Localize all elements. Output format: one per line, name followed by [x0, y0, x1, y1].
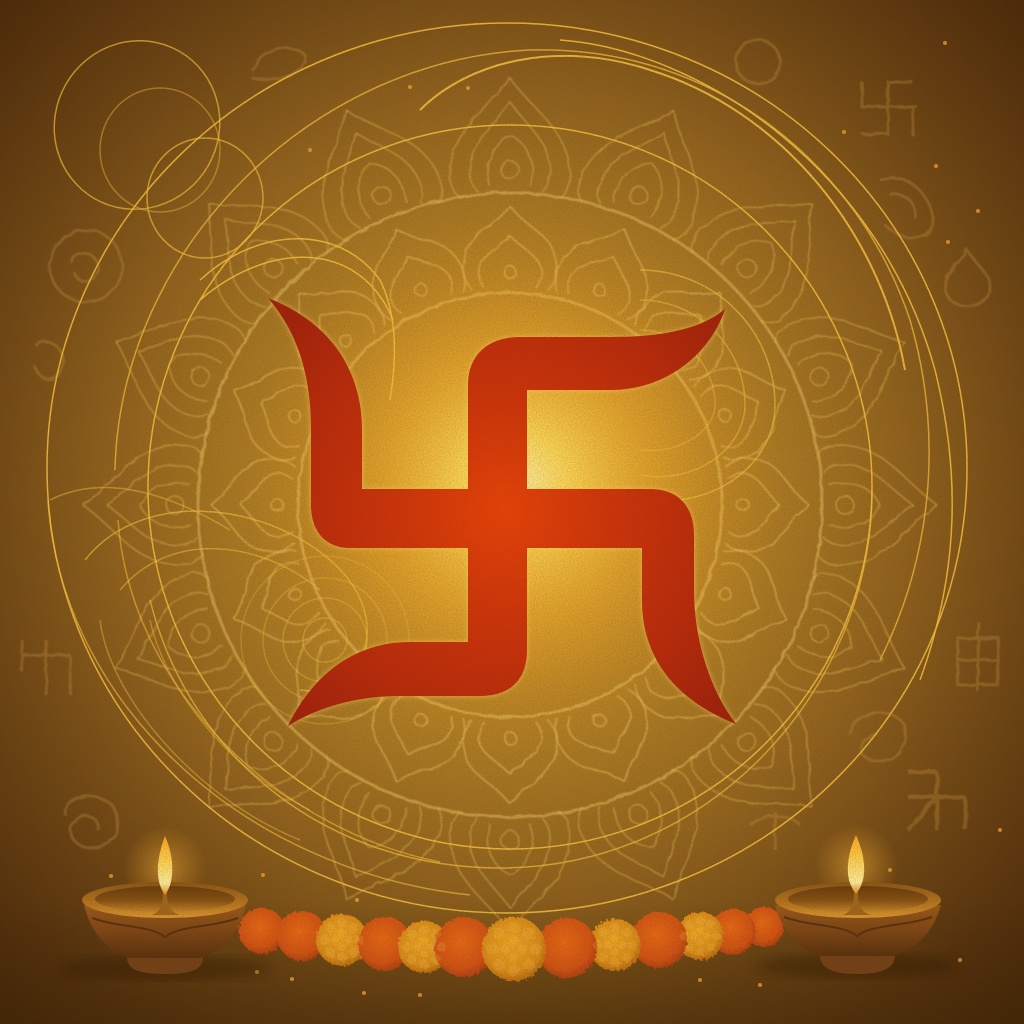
right spirals in centre — [640, 270, 775, 501]
motif: right symbol — [958, 622, 998, 692]
motif: lower left circle — [65, 796, 118, 848]
motif: left circle — [50, 230, 122, 302]
motif: left symbol — [22, 640, 70, 695]
top-left coils — [23, 10, 251, 240]
motif: top left om — [252, 48, 306, 80]
motif: bottom squiggle — [750, 812, 800, 850]
motif: lower right circle — [850, 713, 906, 761]
petal texture — [320, 916, 720, 977]
motif: right swirl circle — [880, 178, 932, 238]
floor shading — [0, 900, 1024, 1024]
wick — [843, 892, 871, 915]
symbol glow — [268, 298, 736, 726]
motif: right drop — [945, 250, 990, 306]
flame — [158, 836, 172, 895]
auspicious symbol: red shape with glow — [268, 298, 736, 726]
bowl — [775, 905, 941, 956]
bowl ornament — [92, 918, 238, 937]
motif: top circle — [736, 40, 780, 84]
foot — [820, 950, 895, 974]
outer petal ring — [83, 78, 937, 932]
lower left spirals — [85, 511, 367, 691]
motif: left small — [34, 342, 63, 379]
flame halo — [814, 824, 898, 908]
symbol body — [268, 298, 736, 726]
mandala — [83, 78, 937, 932]
diya: right — [757, 824, 957, 978]
motif: lower right symbol — [908, 772, 965, 830]
wick — [152, 892, 180, 915]
interior — [95, 886, 235, 912]
rim — [82, 882, 248, 918]
faint corner motifs — [22, 40, 998, 850]
flame — [848, 835, 864, 894]
bowl — [84, 905, 246, 958]
diya: left — [60, 826, 270, 980]
inner petal ring — [211, 206, 809, 804]
bowl ornament — [784, 917, 932, 936]
interior — [788, 886, 928, 912]
foot — [127, 952, 203, 974]
flame halo — [123, 826, 207, 910]
motif: top right symbol — [862, 82, 918, 136]
shadow — [60, 956, 270, 980]
marigold flowers — [239, 907, 784, 981]
shadow — [757, 954, 957, 978]
marigold garland — [239, 907, 784, 981]
rim — [775, 882, 941, 918]
mandala rings — [198, 193, 822, 817]
